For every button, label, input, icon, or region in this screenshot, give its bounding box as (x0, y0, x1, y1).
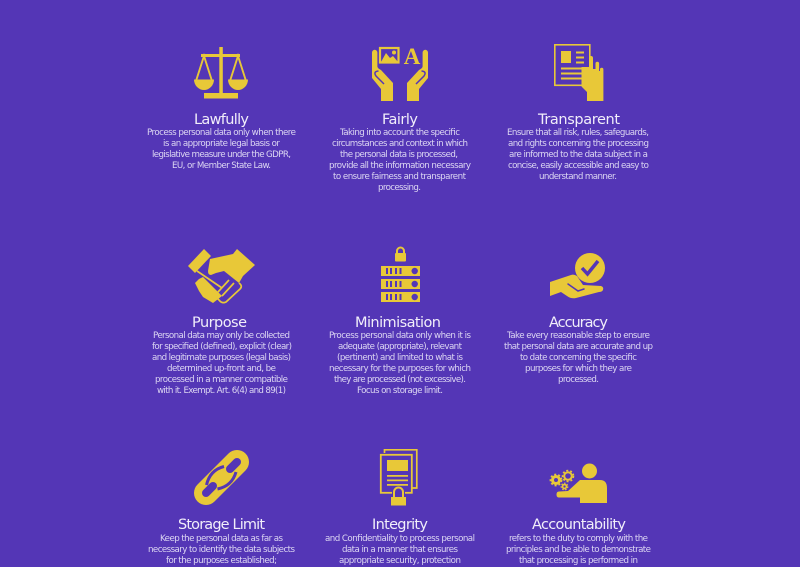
heading: Integrity: Integrity (372, 517, 428, 533)
panel: Integrity (325, 450, 475, 566)
text block: Accuracy: that personal data are accurate and up (504, 342, 653, 352)
text block: Accuracy: Take every reasonable step to ensure (506, 331, 650, 341)
text block: Minimisation (329, 331, 471, 396)
panel: Transparent (507, 45, 649, 182)
heading: Accountability: Accountability (532, 517, 626, 533)
text block: Purpose: processed in a manner compatible (155, 375, 288, 385)
heading: Minimisation: Minimisation (355, 315, 441, 331)
text block: Transparent: understand manner. (539, 172, 617, 182)
text block: Purpose: Personal data may only be collected (153, 331, 290, 341)
text block: Minimisation: Process personal data only when it is (329, 331, 471, 341)
text block: Minimisation: (pertinent) and limited to what is (337, 353, 463, 363)
text block: Accuracy: to date concerning the specific (520, 353, 637, 363)
text block: Accountability: that processing is performed in (519, 556, 638, 566)
panel: Fairly (329, 44, 471, 193)
text block: Fairly: to ensure fairness and transparent (333, 172, 467, 182)
heading: Transparent: Transparent (537, 112, 620, 128)
panel: Purpose (152, 249, 292, 396)
text block: Accountability: refers to the duty to comply with the (509, 534, 648, 544)
text block: Integrity (325, 534, 475, 566)
heading: Accuracy: Accuracy (549, 315, 608, 331)
text block: Accountability (506, 534, 651, 566)
text block: Accuracy: purposes for which they are (525, 364, 632, 374)
icon: document and raised hand (555, 45, 603, 101)
text block: Fairly: circumstances and context in which (332, 139, 468, 149)
heading: Purpose: Purpose (192, 315, 247, 331)
icon: scales (194, 47, 248, 98)
panel: Minimisation (329, 248, 471, 396)
text block: Transparent: are informed to the data subject in a (509, 150, 648, 160)
text block: Fairly: provide all the information necessary (329, 161, 471, 171)
text block: Storage Limit (148, 534, 295, 566)
icon: person with gears (550, 464, 607, 503)
text block: Lawfully: legislative measure under the GDPR, (152, 150, 291, 160)
text block: Storage Limit: Keep the personal data as far as (160, 534, 283, 544)
text block: Transparent: Ensure that all risk, rules, safeguards, (507, 128, 649, 138)
text block: Fairly (329, 128, 471, 193)
text block: Lawfully (147, 128, 296, 171)
text block: Accountability: principles and be able to demonstrate (506, 545, 651, 555)
heading: Fairly: Fairly (382, 112, 418, 128)
panel: Accuracy (504, 253, 653, 385)
text block: Lawfully: is an appropriate legal basis or (163, 139, 280, 149)
icon: hand holding check mark (550, 253, 605, 298)
icon: locked documents (381, 450, 417, 506)
text block: Purpose (152, 331, 292, 396)
icon: chain link (206, 462, 237, 493)
text block: Fairly: the personal data is processed, (340, 150, 458, 160)
text block: Transparent (507, 128, 649, 182)
text block: Fairly: processing. (378, 183, 421, 193)
icon: hands holding image and letter (372, 44, 428, 101)
text block: Purpose: and legitimate purposes (legal basis) (152, 353, 291, 363)
heading: Storage Limit: Storage Limit (178, 517, 265, 533)
text block: Storage Limit: necessary to identify the data subjects (148, 545, 295, 555)
text block: Integrity: appropriate security, protection (339, 556, 461, 566)
text block: Integrity: data in a manner that ensures (342, 545, 458, 555)
panel: Accountability (506, 464, 651, 566)
panel: Lawfully (147, 47, 296, 171)
heading: Lawfully: Lawfully (194, 112, 249, 128)
icon: handshake (188, 249, 255, 303)
text block: Transparent: and rights concerning the processing (508, 139, 649, 149)
text block: Minimisation: adequate (appropriate), relevant (338, 342, 463, 352)
text block: Accuracy (504, 331, 653, 385)
text block: Lawfully: Process personal data only when there (147, 128, 296, 138)
icon: padlock on server stack (381, 248, 420, 302)
text block: Storage Limit: for the purposes established; (166, 556, 277, 566)
text block: Purpose: for specified (defined), explicit (clear) (152, 342, 292, 352)
text block: Transparent: concise, easily accessible and easy to (508, 161, 649, 171)
text block: Purpose: with it. Exempt. Art. 6(4) and 89(1) (157, 386, 286, 396)
text block: Purpose: determined up-front and, be (167, 364, 276, 374)
text block: Lawfully: EU, or Member State Law. (172, 161, 271, 171)
icon: hands holding image and letter: A (404, 44, 421, 69)
text block: Accuracy: processed. (558, 375, 599, 385)
text block: Minimisation: they are processed (not excessive). (334, 375, 466, 385)
text block: Minimisation: Focus on storage limit. (357, 386, 443, 396)
text block: Minimisation: necessary for the purposes for which (329, 364, 471, 374)
text block: Integrity: and Confidentiality to process personal (325, 534, 475, 544)
panel: Storage Limit (148, 462, 295, 566)
text block: Fairly: Taking into account the specific (339, 128, 460, 138)
